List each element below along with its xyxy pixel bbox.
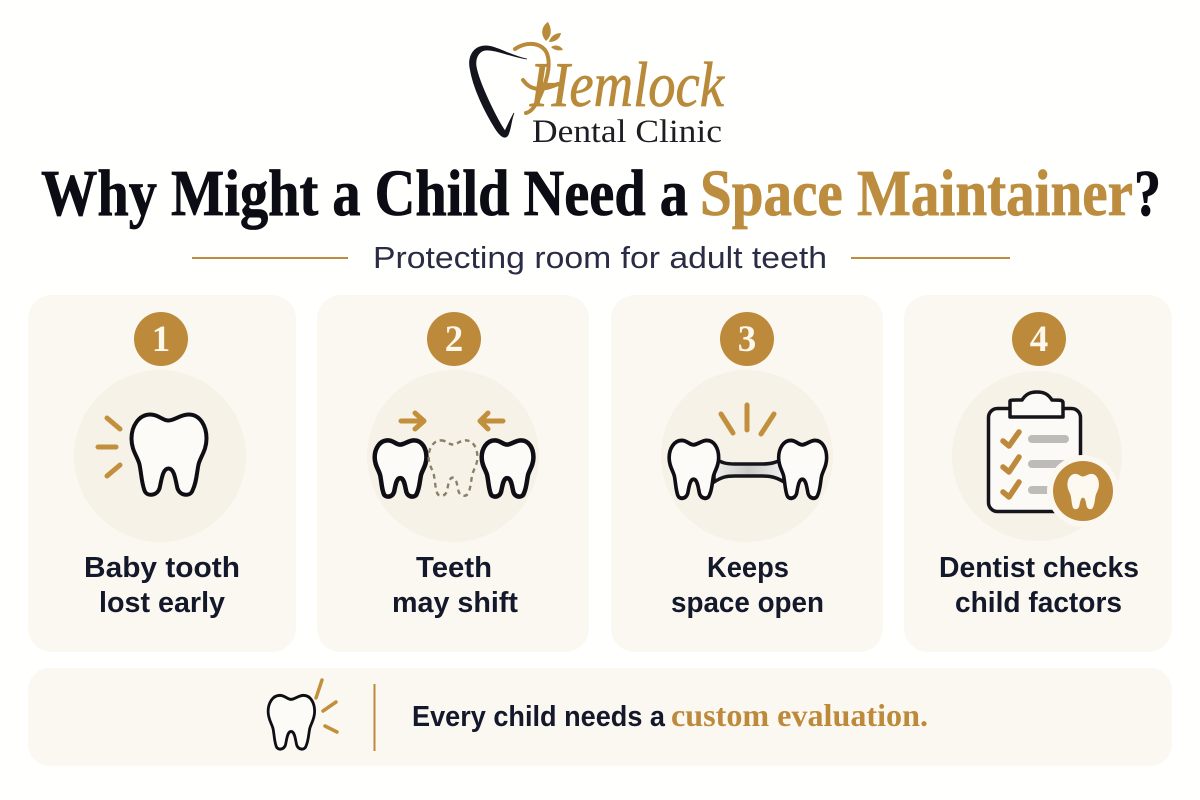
title	[41, 157, 1161, 230]
number badge 2: 2	[445, 319, 463, 360]
icon: tooth with sparks	[268, 680, 337, 749]
title: Space Maintainer	[700, 157, 1133, 230]
logo: Hemlock Dental Clinic: Dental Clinic	[532, 114, 722, 150]
label 4	[939, 552, 1139, 619]
icon: shifting teeth with arrows	[375, 413, 533, 497]
number badge 1: 1	[152, 319, 170, 360]
panel 4: dentist checks child factors	[904, 295, 1172, 652]
panel 2: teeth may shift	[317, 295, 589, 652]
icon: tooth with gold marks	[98, 414, 206, 495]
title: Why Might a Child Need a	[41, 157, 688, 230]
number badge 2	[427, 312, 481, 366]
label 4: child factors	[955, 587, 1122, 619]
number badge 3: 3	[738, 319, 756, 360]
panel 3: keeps space open	[611, 295, 883, 652]
label 1	[84, 552, 240, 619]
label 1: Baby tooth	[84, 552, 240, 584]
icon: space maintainer between teeth	[669, 405, 827, 498]
label 3	[671, 552, 824, 619]
label 2: Teeth	[416, 552, 492, 584]
logo gold swash	[515, 44, 558, 113]
bottom callout: custom evaluation.	[671, 697, 928, 733]
logo wordmark: Hemlock	[529, 50, 725, 120]
divider	[374, 684, 376, 751]
label 2: may shift	[392, 587, 518, 619]
label 2	[392, 552, 518, 619]
number badge 3	[720, 312, 774, 366]
bottom callout	[28, 668, 1172, 766]
number badge 1	[134, 312, 188, 366]
label 3: space open	[671, 587, 824, 619]
logo tooth outline	[470, 46, 527, 137]
number badge 4	[1012, 312, 1066, 366]
subtitle with rules: Protecting room for adult teeth	[373, 240, 827, 275]
label 4: Dentist checks	[939, 552, 1139, 584]
number badge 4: 4	[1030, 319, 1048, 360]
panel 1: baby tooth lost early	[28, 295, 296, 652]
label 1: lost early	[99, 587, 225, 619]
title: ?	[1134, 157, 1161, 230]
label 3: Keeps	[707, 552, 789, 584]
logo: Hemlock Dental Clinic	[470, 22, 725, 150]
logo leaves	[542, 22, 563, 50]
callout text: Every child needs a	[412, 701, 666, 733]
icon: clipboard with tooth badge	[988, 392, 1119, 527]
